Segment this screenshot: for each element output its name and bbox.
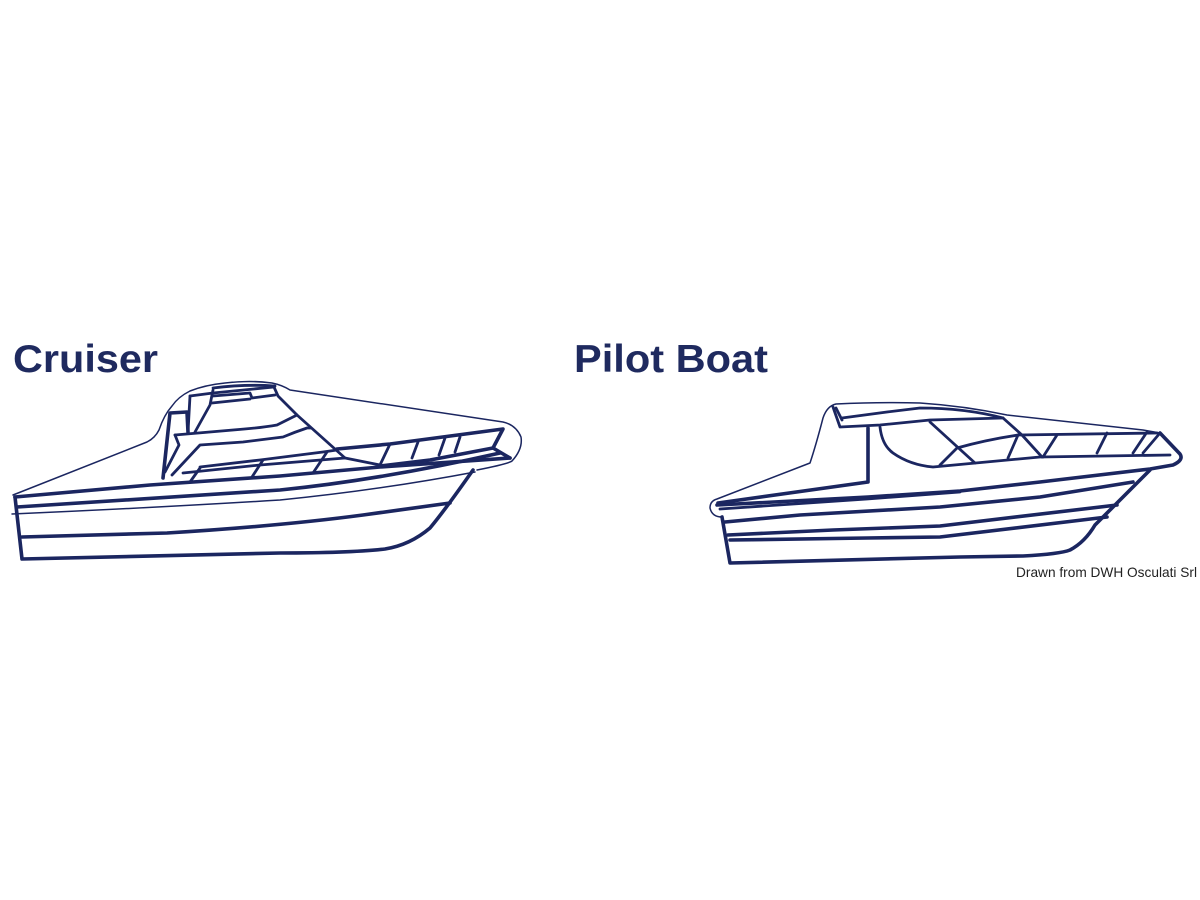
- pilot boat roof and cabin: [718, 407, 1170, 503]
- cruiser foredeck windscreen: [337, 429, 510, 466]
- pilot boat cover outline: [710, 403, 1160, 517]
- cruiser cover outline: [13, 382, 521, 495]
- icon: cruiser boat line drawing: [12, 382, 521, 559]
- credit text: Drawn from DWH Osculati Srl: [1016, 564, 1197, 580]
- pilot boat windscreen struts: [1008, 432, 1160, 458]
- cruiser flybridge and cabin: [163, 385, 345, 482]
- pilot boat hull: [717, 433, 1181, 563]
- heading: Cruiser: Cruiser: [13, 338, 158, 381]
- icon: pilot boat line drawing: [710, 403, 1181, 563]
- cruiser hull: [12, 453, 510, 559]
- heading: Pilot Boat: Pilot Boat: [574, 338, 768, 381]
